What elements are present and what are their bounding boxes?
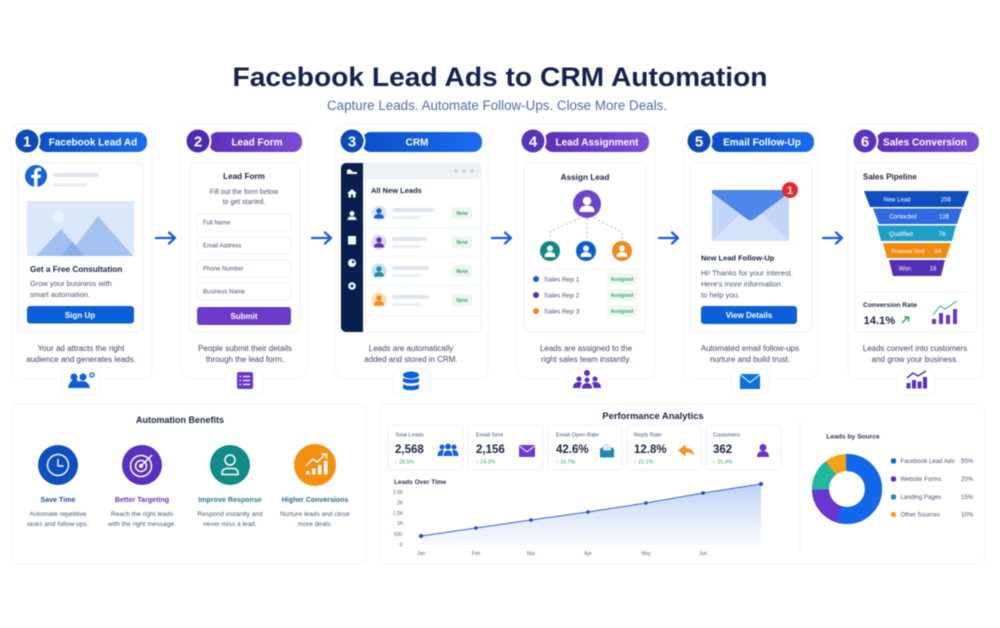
caption: right sales team instantly. bbox=[541, 355, 631, 364]
legend: 10% bbox=[961, 512, 974, 518]
line chart: leads over time: 2.5K bbox=[393, 490, 404, 496]
panel: step 1 Facebook Lead Ad bbox=[11, 124, 152, 395]
line chart: leads over time: Jan bbox=[417, 551, 425, 557]
form fields: Business Name bbox=[203, 290, 246, 296]
sales rep list: Assigned bbox=[611, 277, 633, 283]
step header 3: CRM bbox=[406, 138, 428, 148]
subtitle: Capture Leads. Automate Follow-Ups. Close More Deals. bbox=[327, 98, 667, 113]
kpi: email sent: Email Sent bbox=[476, 432, 503, 438]
sales rep list: Sales Rep 2 bbox=[544, 292, 580, 300]
email card: New Lead Follow-Up bbox=[701, 254, 775, 262]
step header 5 bbox=[686, 128, 814, 154]
button: sign up bbox=[27, 306, 134, 324]
step header 1 bbox=[14, 128, 147, 154]
step header 6: Sales Conversion bbox=[883, 138, 967, 148]
caption: Leads are assigned to the bbox=[540, 344, 633, 353]
icon: team bbox=[568, 369, 606, 395]
kpi: email open rate: ↑ 16.7% bbox=[556, 460, 576, 466]
pipeline card bbox=[855, 163, 977, 332]
panel: step 3 CRM bbox=[335, 124, 488, 395]
step header 4: 4 bbox=[529, 134, 538, 150]
mini bar chart bbox=[932, 301, 957, 324]
kpi: customers: 362 bbox=[713, 444, 732, 456]
icon: growth chart bbox=[897, 369, 935, 395]
benefit: higher conversions bbox=[280, 444, 350, 528]
legend: Landing Pages bbox=[900, 494, 941, 501]
caption: and grow your business. bbox=[872, 355, 958, 364]
line chart: leads over time: Leads Over Time bbox=[394, 479, 447, 486]
benefit: save time: Save Time bbox=[41, 496, 76, 504]
lead rows: New bbox=[456, 269, 468, 275]
sales rep list bbox=[533, 273, 637, 317]
kpi: customers: Customers bbox=[713, 432, 740, 438]
sales funnel: Contacted bbox=[889, 214, 917, 220]
kpi: total leads: Total Leads bbox=[395, 432, 424, 438]
icon: envelope with notification: 1 bbox=[787, 185, 793, 197]
arrow 1 bbox=[156, 232, 175, 244]
panel: automation benefits bbox=[12, 404, 366, 564]
kpi: reply rate: Reply Rate bbox=[634, 432, 662, 438]
step header 2 bbox=[184, 128, 302, 154]
button: submit: Submit bbox=[230, 312, 258, 321]
arrow 4 bbox=[659, 232, 678, 244]
benefit: better targeting: Better Targeting bbox=[115, 496, 169, 504]
lead rows: New bbox=[456, 240, 468, 246]
kpi: total leads bbox=[388, 425, 463, 470]
icon: up arrow bbox=[902, 317, 908, 323]
kpi: customers: ↑ 31.4% bbox=[713, 460, 733, 466]
email card: Here's more information bbox=[701, 280, 781, 288]
ad image placeholder bbox=[27, 201, 134, 256]
sales funnel: 256 bbox=[941, 198, 952, 204]
kpi: email sent: ↑ 24.3% bbox=[476, 460, 496, 466]
caption: Leads are automatically bbox=[369, 344, 453, 353]
donut chart: leads by source: Leads by Source bbox=[826, 434, 880, 440]
legend: Other Sources bbox=[900, 512, 940, 518]
line chart: leads over time bbox=[393, 479, 763, 557]
caption: added and stored in CRM. bbox=[364, 355, 458, 364]
benefit: better targeting bbox=[107, 445, 176, 528]
lead rows bbox=[363, 206, 481, 316]
sales funnel: Won bbox=[899, 266, 911, 272]
sales funnel: 18 bbox=[930, 266, 937, 272]
line chart: leads over time: 2K bbox=[397, 500, 404, 506]
panel: step 4 Lead Assignment bbox=[517, 124, 655, 395]
ad mockup card: Get a Free Consultation bbox=[30, 265, 122, 274]
kpi: total leads: 2,568 bbox=[395, 444, 424, 456]
caption: Automated email follow-ups bbox=[701, 344, 799, 353]
kpi: email open rate bbox=[548, 425, 622, 470]
step header 6: 6 bbox=[861, 134, 869, 150]
sales rep list: Assigned bbox=[611, 293, 633, 299]
ad mockup card: smart automation. bbox=[30, 290, 90, 299]
crm window: All New Leads bbox=[371, 186, 422, 195]
form mockup card: to get started. bbox=[223, 199, 265, 206]
legend: Website Forms bbox=[900, 476, 941, 483]
legend: Facebook Lead Ads bbox=[900, 458, 954, 465]
form fields: Phone Number bbox=[203, 266, 243, 272]
icon: email bbox=[731, 369, 769, 395]
benefit: save time bbox=[27, 445, 89, 528]
legend: 20% bbox=[961, 476, 974, 483]
line chart: leads over time: May bbox=[641, 551, 651, 557]
caption: People submit their details bbox=[198, 344, 292, 353]
step header 2: 2 bbox=[194, 134, 202, 150]
caption: nurture and build trust. bbox=[710, 355, 790, 364]
pipeline card: 14.1% bbox=[864, 315, 895, 327]
icon: database bbox=[393, 369, 430, 395]
form mockup card: Fill out the form below bbox=[210, 189, 279, 196]
sales funnel: Proposal Sent bbox=[891, 249, 925, 255]
step header 3 bbox=[338, 128, 482, 154]
assignment tree bbox=[540, 190, 632, 261]
kpi: email open rate: Email Open Rate bbox=[556, 432, 599, 438]
benefit: save time: tasks and follow-ups. bbox=[27, 521, 89, 528]
sales funnel: 78 bbox=[939, 232, 946, 238]
kpi: email open rate: 42.6% bbox=[556, 444, 589, 456]
kpi: reply rate: 12.8% bbox=[634, 444, 667, 456]
benefit: improve response bbox=[197, 445, 263, 528]
panel: step 6 Sales Conversion bbox=[848, 124, 983, 395]
step header 5: 5 bbox=[695, 134, 703, 150]
button: submit bbox=[197, 307, 291, 325]
lead rows: New bbox=[456, 211, 468, 217]
line chart: leads over time: Jun bbox=[699, 551, 707, 557]
form fields: Full Name bbox=[203, 220, 231, 226]
pipeline card: Conversion Rate bbox=[863, 302, 917, 309]
legend bbox=[891, 458, 974, 518]
benefit: improve response: Respond instantly and bbox=[197, 511, 263, 518]
kpi: email sent bbox=[468, 425, 543, 470]
lead rows: New bbox=[456, 298, 468, 304]
sales funnel: 128 bbox=[939, 214, 950, 220]
icon: list bbox=[226, 369, 263, 395]
icon: envelope with notification bbox=[712, 182, 798, 241]
benefit: higher conversions: Nurture leads and close bbox=[280, 511, 350, 518]
heading: Automation Benefits bbox=[136, 415, 224, 425]
line chart: leads over time: Feb bbox=[472, 551, 481, 557]
panel: step 5 Email Follow-Up bbox=[683, 124, 818, 395]
ad mockup card bbox=[18, 163, 143, 332]
benefit: save time: Automate repetitive bbox=[30, 511, 87, 518]
form fields bbox=[197, 214, 291, 300]
step header 1: Facebook Lead Ad bbox=[49, 138, 137, 148]
step header 3: 3 bbox=[348, 134, 356, 150]
sales rep list: Sales Rep 1 bbox=[544, 276, 580, 284]
arrow 2 bbox=[312, 232, 331, 244]
panel: performance analytics bbox=[380, 404, 985, 564]
benefit: higher conversions: Higher Conversions bbox=[282, 497, 348, 504]
pipeline card: Sales Pipeline bbox=[863, 172, 917, 182]
arrow 3 bbox=[492, 232, 511, 244]
sales funnel bbox=[864, 191, 969, 276]
crm window bbox=[341, 163, 481, 332]
email card: to help you. bbox=[701, 290, 740, 300]
benefit: higher conversions: more deals. bbox=[298, 521, 332, 528]
form fields: Email Address bbox=[203, 244, 241, 250]
step header 2: Lead Form bbox=[231, 138, 283, 148]
sidebar icons bbox=[347, 169, 357, 290]
arrow 5 bbox=[823, 232, 842, 244]
kpi: reply rate bbox=[627, 425, 701, 470]
panel: step 2 Lead Form bbox=[181, 124, 307, 395]
ad mockup card: Grow your business with bbox=[30, 279, 112, 288]
step header 4 bbox=[520, 128, 649, 154]
legend: 15% bbox=[961, 494, 974, 501]
legend: 55% bbox=[961, 458, 974, 465]
step header 5: Email Follow-Up bbox=[723, 138, 801, 148]
kpi: email sent: 2,156 bbox=[476, 444, 505, 456]
assignment card: Assign Lead bbox=[561, 173, 609, 182]
line chart: leads over time: Apr bbox=[584, 551, 592, 557]
button: view details: View Details bbox=[726, 311, 773, 320]
benefit: improve response: never miss a lead. bbox=[203, 521, 257, 528]
step header 6 bbox=[852, 128, 979, 154]
sales funnel: New Lead bbox=[883, 198, 911, 204]
sales funnel: Qualified bbox=[889, 232, 913, 238]
caption: through the lead form. bbox=[206, 355, 284, 364]
kpi: reply rate: ↑ 22.1% bbox=[634, 460, 654, 466]
email card: Hi! Thanks for your interest. bbox=[701, 268, 793, 278]
email card bbox=[690, 163, 812, 332]
form mockup card bbox=[190, 163, 300, 332]
caption: Leads convert into customers bbox=[863, 344, 967, 353]
form mockup card: Lead Form bbox=[223, 172, 265, 181]
caption: Your ad attracts the right bbox=[38, 344, 125, 353]
heading: Performance Analytics bbox=[602, 410, 704, 421]
sales funnel: 34 bbox=[935, 249, 942, 255]
icon: facebook bbox=[25, 165, 47, 187]
line chart: leads over time: 1K bbox=[397, 521, 404, 527]
line chart: leads over time: 500 bbox=[394, 532, 402, 538]
kpi: customers bbox=[706, 425, 781, 470]
line chart: leads over time: Mar bbox=[527, 551, 536, 557]
title: Facebook Lead Ads to CRM Automation bbox=[232, 62, 768, 92]
line chart: leads over time: 0 bbox=[400, 542, 403, 548]
benefit: better targeting: with the right message. bbox=[107, 521, 176, 528]
step header 4: Lead Assignment bbox=[556, 138, 639, 148]
assignment card bbox=[524, 163, 646, 332]
button: sign up: Sign Up bbox=[65, 311, 95, 320]
benefit: improve response: Improve Response bbox=[198, 496, 262, 504]
icon: people bbox=[62, 369, 99, 395]
step header 1: 1 bbox=[23, 134, 31, 150]
caption: audience and generates leads. bbox=[26, 355, 136, 364]
donut chart: leads by source bbox=[820, 434, 974, 518]
button: view details bbox=[701, 306, 797, 324]
sales rep list: Sales Rep 3 bbox=[544, 308, 580, 316]
kpi: total leads: ↑ 28.5% bbox=[395, 460, 415, 466]
sales rep list: Assigned bbox=[611, 309, 633, 315]
line chart: leads over time: 1.5K bbox=[393, 511, 404, 517]
benefit: better targeting: Reach the right leads bbox=[111, 511, 174, 518]
